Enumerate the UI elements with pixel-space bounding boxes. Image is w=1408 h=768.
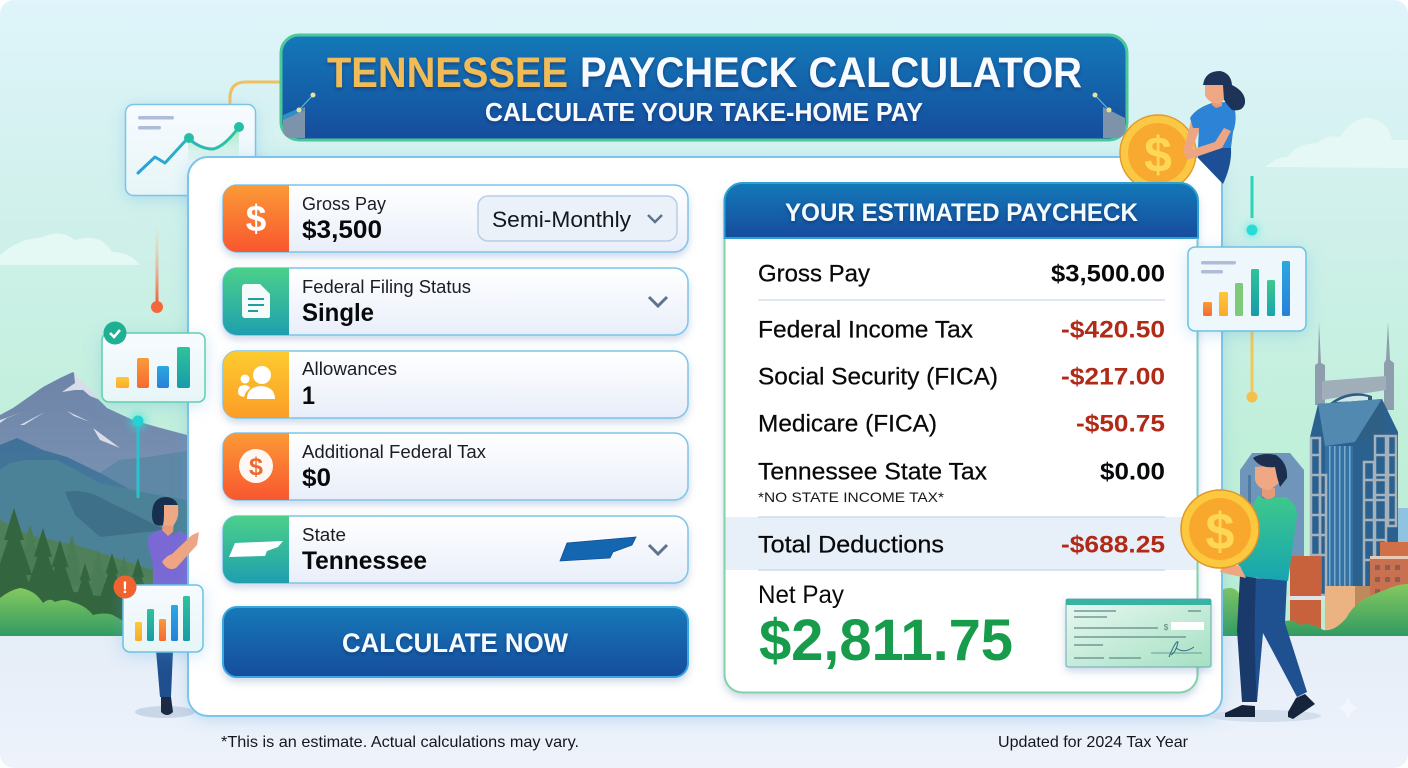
row: Tennessee state tax: *NO STATE INCOME TAX* bbox=[758, 489, 945, 505]
row: gross pay bbox=[758, 260, 1165, 288]
title text: TENNESSEE bbox=[327, 49, 568, 97]
icon: alert badge: ! bbox=[122, 578, 128, 597]
row: social security: -$217.00 bbox=[1061, 364, 1165, 390]
connector: right teal line with dot bbox=[1244, 176, 1260, 238]
dropdown: pay period: Semi-Monthly bbox=[492, 207, 631, 232]
row: total deductions: Total Deductions bbox=[758, 532, 944, 558]
button: calculate now: CALCULATE NOW bbox=[342, 628, 568, 658]
skyline bbox=[1240, 322, 1408, 634]
panel header bbox=[724, 183, 1198, 238]
icon: chevron bbox=[649, 297, 667, 306]
person: top woman bbox=[1183, 71, 1245, 184]
icon: dollar coin bbox=[223, 433, 289, 500]
small bar chart card bbox=[102, 322, 205, 402]
row: medicare: Medicare (FICA) bbox=[758, 410, 937, 438]
bushes right bbox=[1222, 584, 1408, 636]
coin: held: $ bbox=[1206, 503, 1235, 561]
connector: right yellow line with dot bbox=[1246, 331, 1258, 402]
row: social security bbox=[758, 364, 1165, 390]
row: total deductions bbox=[726, 517, 1196, 570]
button: calculate now bbox=[223, 607, 688, 677]
coin: held bbox=[1181, 490, 1259, 568]
dropdown: pay period bbox=[478, 196, 677, 241]
field: additional federal tax bbox=[223, 433, 688, 500]
footnote: estimate: *This is an estimate. Actual calculations may vary. bbox=[221, 734, 579, 751]
icon: paycheck bbox=[1066, 599, 1211, 667]
row: federal income tax bbox=[758, 316, 1165, 344]
row: Tennessee state tax: $0.00 bbox=[1100, 458, 1165, 486]
bar chart card bottom left bbox=[114, 576, 203, 652]
row: total deductions: -$688.25 bbox=[1061, 532, 1165, 558]
icon: Tennessee map bbox=[560, 537, 636, 561]
bar chart card right bbox=[1188, 247, 1306, 331]
panel: estimated paycheck results bbox=[724, 183, 1211, 692]
bushes left bbox=[0, 588, 125, 636]
row: medicare: -$50.75 bbox=[1076, 410, 1165, 438]
left woman arm bbox=[162, 532, 199, 569]
connector: orange line with dot bbox=[151, 220, 163, 313]
value: $0 bbox=[302, 464, 331, 492]
title banner bbox=[281, 35, 1127, 140]
label: Additional Federal Tax bbox=[302, 442, 486, 462]
field: allowances bbox=[223, 351, 688, 418]
icon: dollar coin: $ bbox=[249, 453, 263, 481]
row: Tennessee state tax: Tennessee State Tax bbox=[758, 458, 987, 486]
row: medicare bbox=[758, 410, 1165, 438]
icon: paycheck: $ bbox=[1164, 623, 1169, 632]
row: federal income tax: -$420.50 bbox=[1061, 316, 1165, 344]
forest bbox=[0, 508, 153, 620]
icon: chevron bbox=[649, 545, 667, 554]
icon: people bbox=[223, 351, 289, 418]
row: gross pay: $3,500.00 bbox=[1051, 260, 1165, 288]
value: Single bbox=[302, 299, 374, 327]
field: federal filing status bbox=[223, 268, 688, 335]
row: gross pay: Gross Pay bbox=[758, 260, 870, 288]
icon: dollar sign bbox=[223, 185, 289, 252]
title text: PAYCHECK CALCULATOR bbox=[580, 49, 1082, 97]
connector: teal line with dot bbox=[129, 412, 147, 498]
cloud left bbox=[0, 233, 140, 265]
net pay: $2,811.75 bbox=[759, 608, 1013, 673]
sparkle bbox=[1337, 696, 1359, 720]
icon: Tennessee outline bbox=[223, 516, 289, 583]
footnote: tax year: Updated for 2024 Tax Year bbox=[998, 734, 1189, 751]
value: Tennessee bbox=[302, 547, 427, 575]
cloud right bbox=[1265, 118, 1408, 168]
field: state bbox=[223, 516, 688, 583]
mountain scene bbox=[0, 372, 187, 570]
icon: dollar sign: $ bbox=[246, 198, 267, 239]
icon: document bbox=[223, 268, 289, 335]
net pay: Net Pay bbox=[758, 581, 844, 609]
panel header: YOUR ESTIMATED PAYCHECK bbox=[785, 199, 1138, 227]
line chart card bbox=[126, 104, 256, 196]
banner corner accent right bbox=[1092, 92, 1125, 138]
label: State bbox=[302, 525, 346, 545]
icon: check badge bbox=[104, 322, 126, 344]
panel: main calculator card bbox=[188, 157, 1222, 716]
banner corner accent left bbox=[283, 92, 316, 138]
coin: top: $ bbox=[1144, 127, 1172, 183]
connector: banner to line chart bbox=[230, 82, 280, 106]
person: left woman body bbox=[135, 497, 195, 718]
person: man with coin bbox=[1181, 454, 1321, 722]
row: social security: Social Security (FICA) bbox=[758, 364, 998, 390]
label: Gross Pay bbox=[302, 194, 386, 214]
row: Tennessee state tax bbox=[758, 458, 1165, 505]
field: gross pay bbox=[223, 185, 688, 252]
title text bbox=[327, 49, 1082, 97]
subtitle: CALCULATE YOUR TAKE-HOME PAY bbox=[485, 97, 923, 127]
row: federal income tax: Federal Income Tax bbox=[758, 316, 973, 344]
value: $3,500 bbox=[302, 216, 382, 244]
coin: top bbox=[1120, 115, 1196, 191]
label: Allowances bbox=[302, 359, 397, 379]
label: Federal Filing Status bbox=[302, 277, 471, 297]
value: 1 bbox=[302, 382, 315, 410]
